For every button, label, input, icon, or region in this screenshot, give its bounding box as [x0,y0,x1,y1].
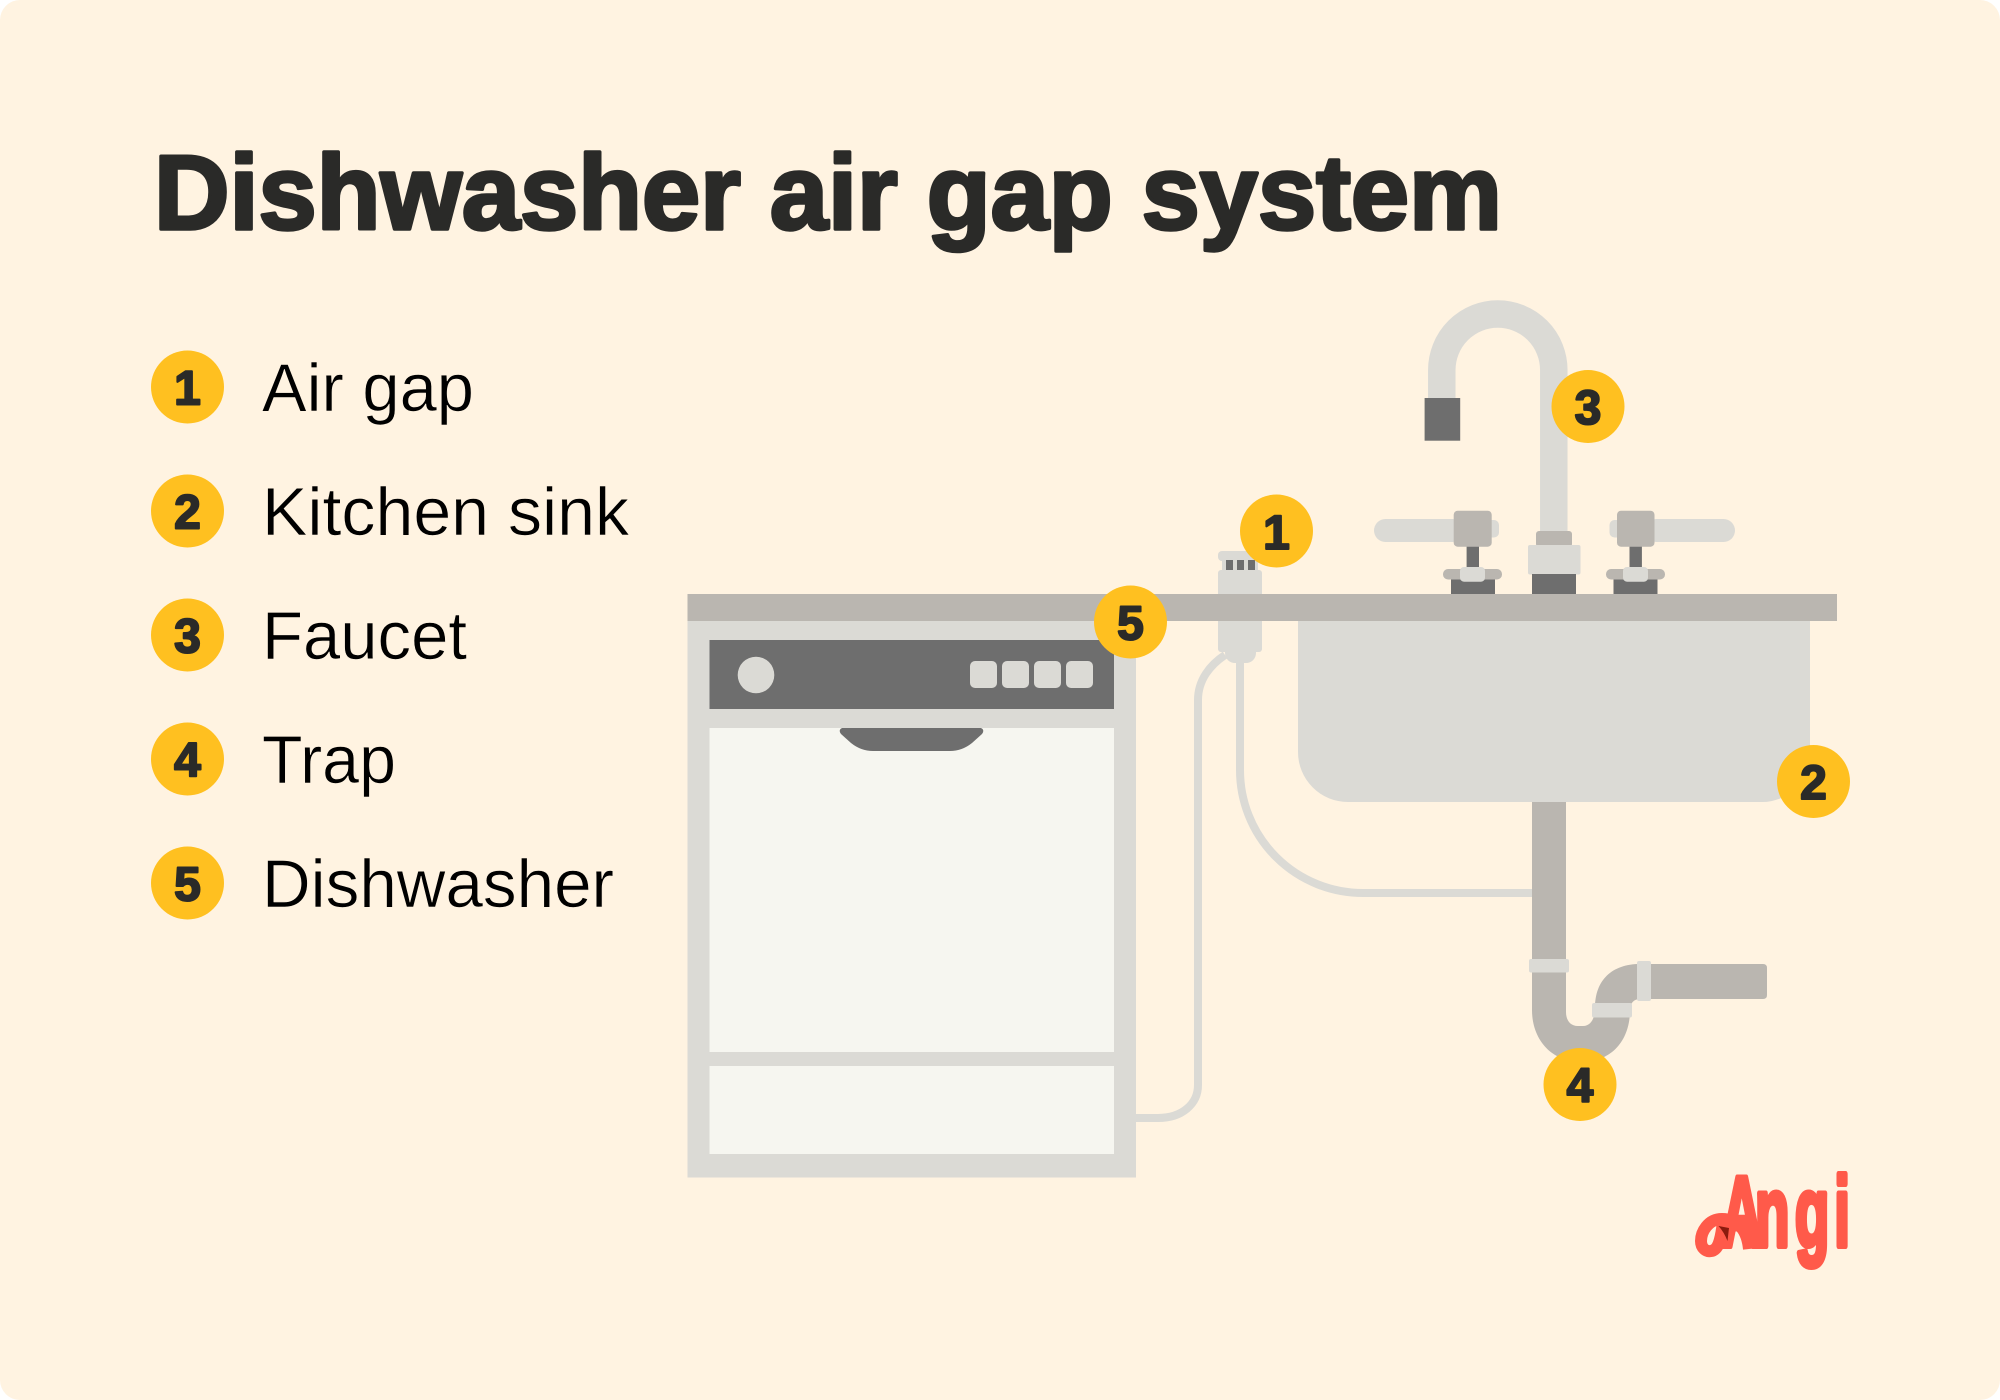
control panel [710,640,1114,709]
faucet [1425,314,1580,594]
legend item 4: trap: 4 [174,734,201,788]
Angi logo: Angi [1721,1158,1850,1268]
air gap slots [1226,560,1255,570]
badge 5: dishwasher: 5 [1117,598,1144,650]
dishwasher [688,621,1136,1178]
pipe collars [1529,959,1651,1018]
badge 5: dishwasher [1094,586,1167,658]
badge 3: faucet: 3 [1575,382,1601,435]
badge 4: trap: 4 [1567,1060,1594,1113]
legend item 2: kitchen sink: 2 [174,486,201,540]
buttons [970,661,1093,688]
dial [738,657,774,693]
logo overlap accent [1718,1226,1729,1241]
badge 2: kitchen sink: 2 [1800,757,1827,810]
legend item 5: dishwasher: Dishwasher [262,846,614,922]
drain pipe and trap [1529,802,1767,1062]
thin hose from air gap to drain [1240,655,1534,893]
badge 3: faucet [1552,370,1624,443]
countertop [688,594,1837,621]
legend item 2: kitchen sink: Kitchen sink [262,474,630,550]
faucet spout arch [1442,314,1554,535]
sink basin [1298,621,1810,802]
legend item 1: air gap [151,350,474,426]
legend item 4: trap [151,722,396,798]
door [710,728,1114,1052]
legend item 4: trap: Trap [262,722,396,798]
legend item 3: faucet: Faucet [262,598,467,674]
faucet nozzle [1425,398,1460,441]
legend item 1: air gap: Air gap [262,350,474,426]
thin hose from dishwasher to air gap [1136,655,1225,1118]
legend item 5: dishwasher: 5 [174,858,201,912]
air gap device [1218,551,1262,663]
badge 1: air gap [1240,494,1313,568]
title: Dishwasher air gap system [154,134,1502,252]
legend item 3: faucet [151,598,467,674]
legend item 3: faucet: 3 [174,610,201,664]
door handle [840,728,983,751]
legend item 1: air gap: 1 [174,362,201,416]
legend list [151,350,630,922]
badge 4: trap [1544,1048,1616,1121]
right handle [1606,511,1735,594]
badge 1: air gap: 1 [1263,507,1290,560]
badge 2: kitchen sink [1777,745,1850,818]
left handle [1374,511,1502,594]
dishwasher body [688,621,1136,1178]
faucet base [1528,531,1580,594]
kick plate [710,1066,1114,1154]
